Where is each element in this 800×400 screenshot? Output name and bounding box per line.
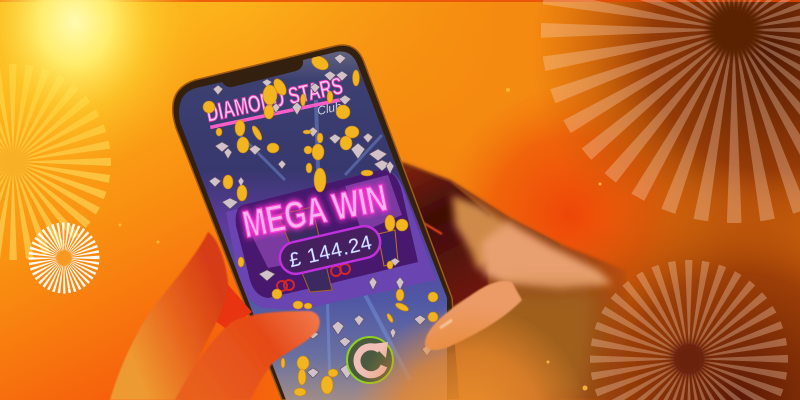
gold coins [203, 53, 438, 396]
middle finger [452, 195, 510, 270]
index finger [110, 232, 228, 400]
sunburst: small white [44, 238, 84, 278]
right index finger on screen [425, 281, 522, 350]
red gap between fingers [214, 280, 252, 330]
left hand with fingers [110, 232, 320, 400]
game logo [207, 77, 343, 130]
game logo: Club [316, 99, 343, 118]
sunburst: left yellow [0, 109, 66, 215]
sunburst: bottom right [632, 302, 746, 400]
spin button [347, 337, 393, 383]
phone screen [170, 45, 460, 400]
light rays on screen [240, 100, 410, 385]
game logo: DIAMOND STARS [204, 73, 345, 128]
slot machine panel [226, 170, 436, 310]
cherries [277, 264, 350, 291]
dust specks [118, 88, 602, 390]
thumb [175, 311, 320, 400]
knuckles [482, 222, 612, 290]
win amount pill [277, 223, 383, 277]
palm [402, 162, 640, 400]
top left glare [0, 0, 340, 240]
bottom orange haze [340, 300, 600, 400]
phone body [173, 45, 460, 400]
mega win text: MEGA WIN [239, 177, 391, 247]
right hand behind phone [402, 162, 640, 400]
smartphone [170, 45, 460, 400]
mega win glow: MEGA WIN [239, 177, 391, 247]
sunburst: top right [629, 0, 800, 135]
shadow gap beside phone [402, 164, 490, 308]
lower palm haze [420, 290, 600, 400]
win amount pill: £ 144.24 [287, 232, 374, 272]
diamonds [209, 54, 432, 379]
